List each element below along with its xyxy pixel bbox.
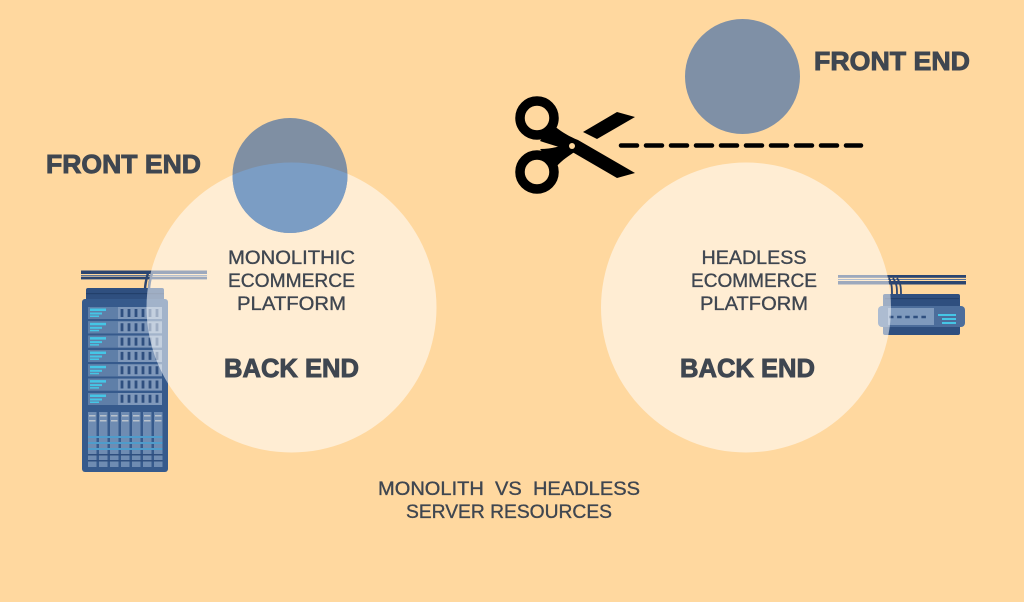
text: monolithic ecommerce platform: ECOMMERCE [228,271,355,292]
caption: MONOLITH VS HEADLESS [378,479,640,500]
caption: SERVER RESOURCES [406,502,612,523]
circle: headless back end [601,162,891,452]
label: front end right: FRONT END [814,46,970,76]
icon: small server router [838,275,966,335]
circle: monolithic front end [232,118,348,233]
cut line [621,143,861,148]
text: monolithic ecommerce platform: PLATFORM [237,294,346,315]
text: monolithic ecommerce platform: MONOLITHIC [228,248,355,269]
text: monolithic ecommerce platform [228,248,355,315]
label: back end right: BACK END [680,353,815,383]
icon: tall server rack [81,270,207,472]
label: front end left: FRONT END [46,149,201,179]
circle: detached headless front end [685,19,800,134]
circle: monolithic back end [146,162,436,452]
caption [378,479,640,523]
text: headless ecommerce platform: PLATFORM [700,294,808,315]
label: back end left: BACK END [224,353,359,383]
icon: scissors [520,101,635,189]
text: headless ecommerce platform: ECOMMERCE [691,271,817,292]
text: headless ecommerce platform: HEADLESS [702,248,806,269]
text: headless ecommerce platform [691,248,817,315]
